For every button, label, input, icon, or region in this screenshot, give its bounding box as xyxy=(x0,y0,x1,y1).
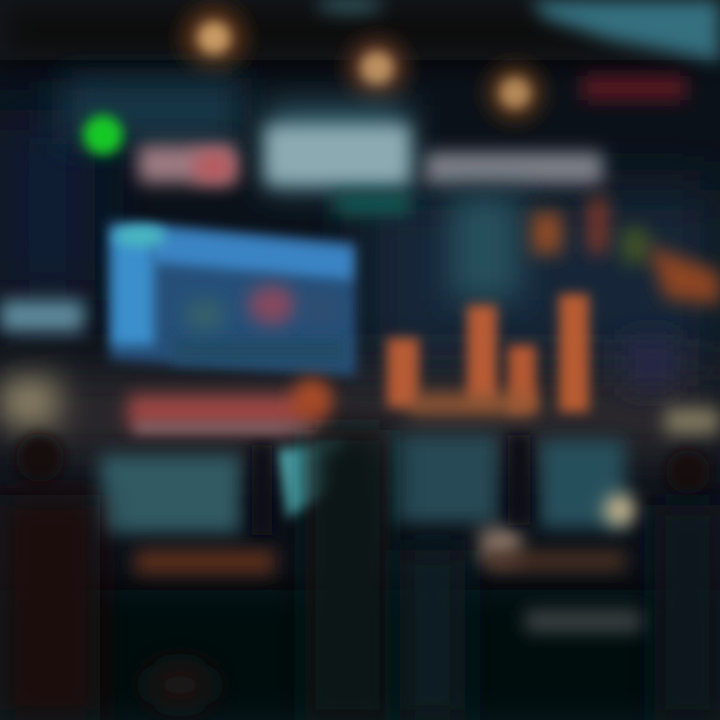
desk monitors xyxy=(100,408,720,562)
silhouettes of people xyxy=(0,430,720,720)
right wall chart xyxy=(450,195,720,386)
red ticker strip xyxy=(128,378,332,432)
ceiling lights xyxy=(180,4,545,123)
desk edges xyxy=(135,550,645,632)
orange bar chart xyxy=(387,294,589,414)
left wall panel xyxy=(0,300,84,426)
top right screen xyxy=(316,0,720,100)
blue monitor xyxy=(108,220,356,376)
icon: green glow xyxy=(83,115,123,155)
main headline sign xyxy=(62,78,603,214)
